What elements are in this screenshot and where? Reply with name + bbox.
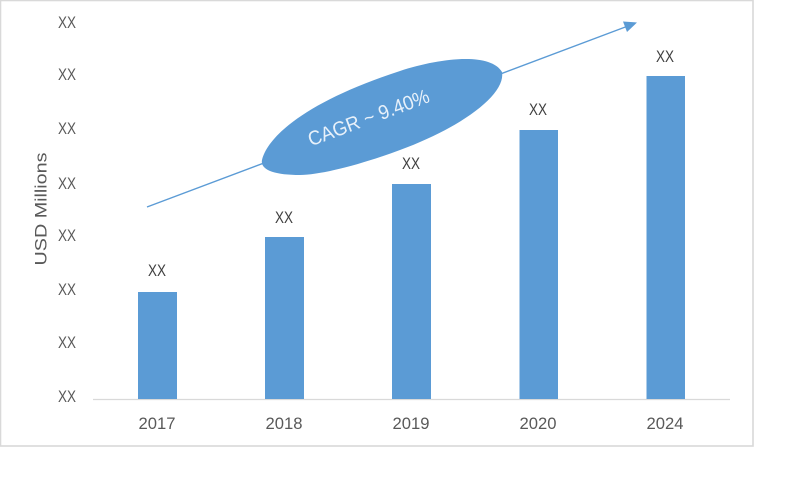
- bar value labels: XX: [402, 154, 420, 173]
- bar value labels: XX: [148, 261, 166, 280]
- y axis labels: XX: [58, 280, 76, 299]
- bars: [138, 76, 685, 399]
- growth arrow: [147, 22, 637, 207]
- x axis year labels: 2018: [266, 414, 302, 433]
- bar value labels: XX: [275, 208, 293, 227]
- CAGR ellipse callout: CAGR ~ 9.40%: [305, 86, 433, 151]
- y axis labels: XX: [58, 226, 76, 245]
- bar value labels: XX: [656, 47, 674, 66]
- y axis labels: XX: [58, 333, 76, 352]
- y axis labels: XX: [58, 387, 76, 406]
- x axis year labels: [138, 414, 684, 433]
- y axis labels: XX: [58, 119, 76, 138]
- bar value labels: XX: [529, 100, 547, 119]
- y axis title: USD Millions: [32, 153, 50, 265]
- x axis year labels: 2024: [646, 414, 684, 433]
- x axis year labels: 2019: [392, 414, 430, 433]
- y axis labels: XX: [58, 13, 76, 32]
- x axis line: [93, 398, 730, 400]
- CAGR ellipse callout: [262, 59, 502, 175]
- x axis year labels: 2017: [138, 414, 176, 433]
- bar value labels: [148, 47, 674, 280]
- y axis labels: XX: [58, 65, 76, 84]
- x axis year labels: 2020: [520, 414, 556, 433]
- y axis labels: XX: [58, 174, 76, 193]
- y axis labels: [58, 13, 76, 406]
